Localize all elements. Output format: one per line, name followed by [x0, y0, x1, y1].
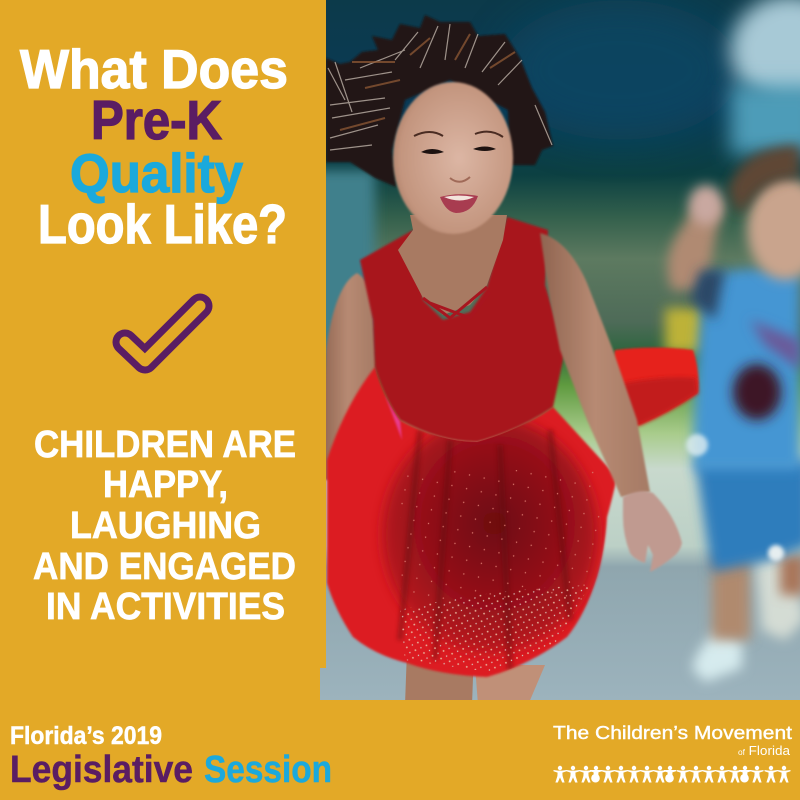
text block: children are happy: CHILDREN ARE: [34, 424, 296, 466]
footer title: Florida's 2019 Legislative Session: Legislative: [10, 749, 193, 791]
logo: paper-doll chain of children: [554, 766, 790, 782]
dress neckline straps: [423, 287, 490, 318]
girl's left arm: [320, 273, 376, 480]
girl's neck and chest: [398, 215, 507, 315]
heading: What Does Pre-K Quality Look Like?: [20, 38, 288, 255]
photo background: blurred playground and path: [310, 0, 800, 700]
footer title: Florida's 2019 Legislative Session: Florida’s 2019: [10, 722, 162, 750]
text block: children are happy: AND ENGAGED: [33, 546, 296, 588]
girl's legs: [405, 662, 545, 700]
logo: The Children's Movement of Florida: The Children’s Movement: [553, 723, 792, 743]
dress bodice: [360, 217, 565, 442]
footer title: Florida's 2019 Legislative Session: [10, 722, 332, 791]
logo: The Children's Movement of Florida: [553, 723, 792, 782]
girl's red skirt: [327, 367, 617, 677]
girl's right arm and hand: [540, 233, 682, 572]
band: gold footer: [0, 700, 800, 800]
panel: gold text panel: [0, 0, 326, 668]
footer title: Florida's 2019 Legislative Session: Session: [204, 749, 332, 791]
heading: What Does Pre-K Quality Look Like?: Look Like?: [38, 193, 287, 255]
text block: children are happy: LAUGHING: [70, 505, 261, 547]
photo: girl in red dress running: [310, 0, 800, 705]
logo: The Children's Movement of Florida: of Florida: [738, 743, 791, 758]
girl's face: [393, 82, 513, 234]
flared skirt right: [608, 348, 698, 428]
heading: What Does Pre-K Quality Look Like?: Pre-K: [91, 89, 222, 151]
girl's hair: [326, 15, 553, 187]
text block: children are happy: IN ACTIVITIES: [46, 586, 285, 628]
icon: check mark: [125, 306, 200, 361]
text block: children are happy: [33, 424, 296, 628]
heading: What Does Pre-K Quality Look Like?: Quality: [70, 142, 243, 204]
blurred boy in background: [668, 145, 800, 682]
text block: children are happy: HAPPY,: [103, 464, 228, 506]
heading: What Does Pre-K Quality Look Like?: What Does: [20, 38, 288, 100]
icon: check mark inner: [125, 306, 200, 361]
